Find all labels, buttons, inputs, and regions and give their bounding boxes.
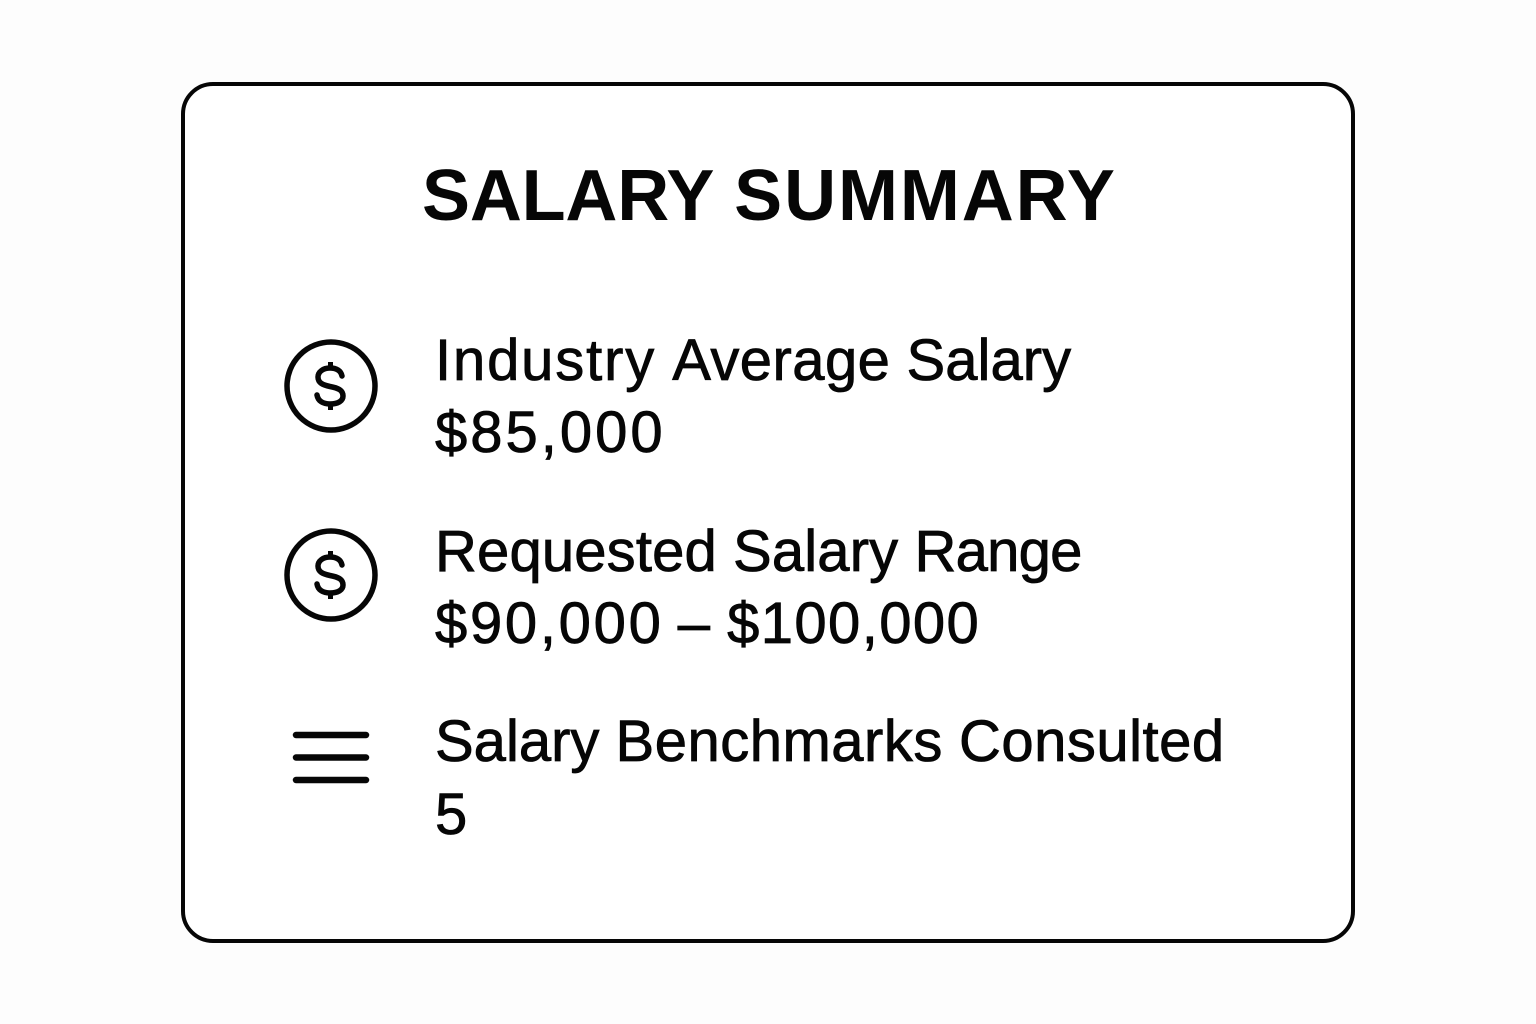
text: requested range value: $90,000 – $100,000 <box>435 591 980 656</box>
icon: dollar circle 1 <box>284 339 378 433</box>
text: benchmarks label: Salary Benchmarks Consulted <box>435 709 1225 774</box>
text: requested range label: Requested Salary Range <box>435 519 1082 584</box>
icon: three lines <box>292 732 370 784</box>
icon: dollar circle 2 <box>284 528 378 622</box>
text: benchmarks value: 5 <box>435 782 467 847</box>
text: industry average label: Industry Average Salary <box>435 328 1071 393</box>
title: SALARY SUMMARY <box>422 156 1117 236</box>
panel: salary summary card <box>181 82 1355 943</box>
text: industry average value: $85,000 <box>435 400 666 465</box>
